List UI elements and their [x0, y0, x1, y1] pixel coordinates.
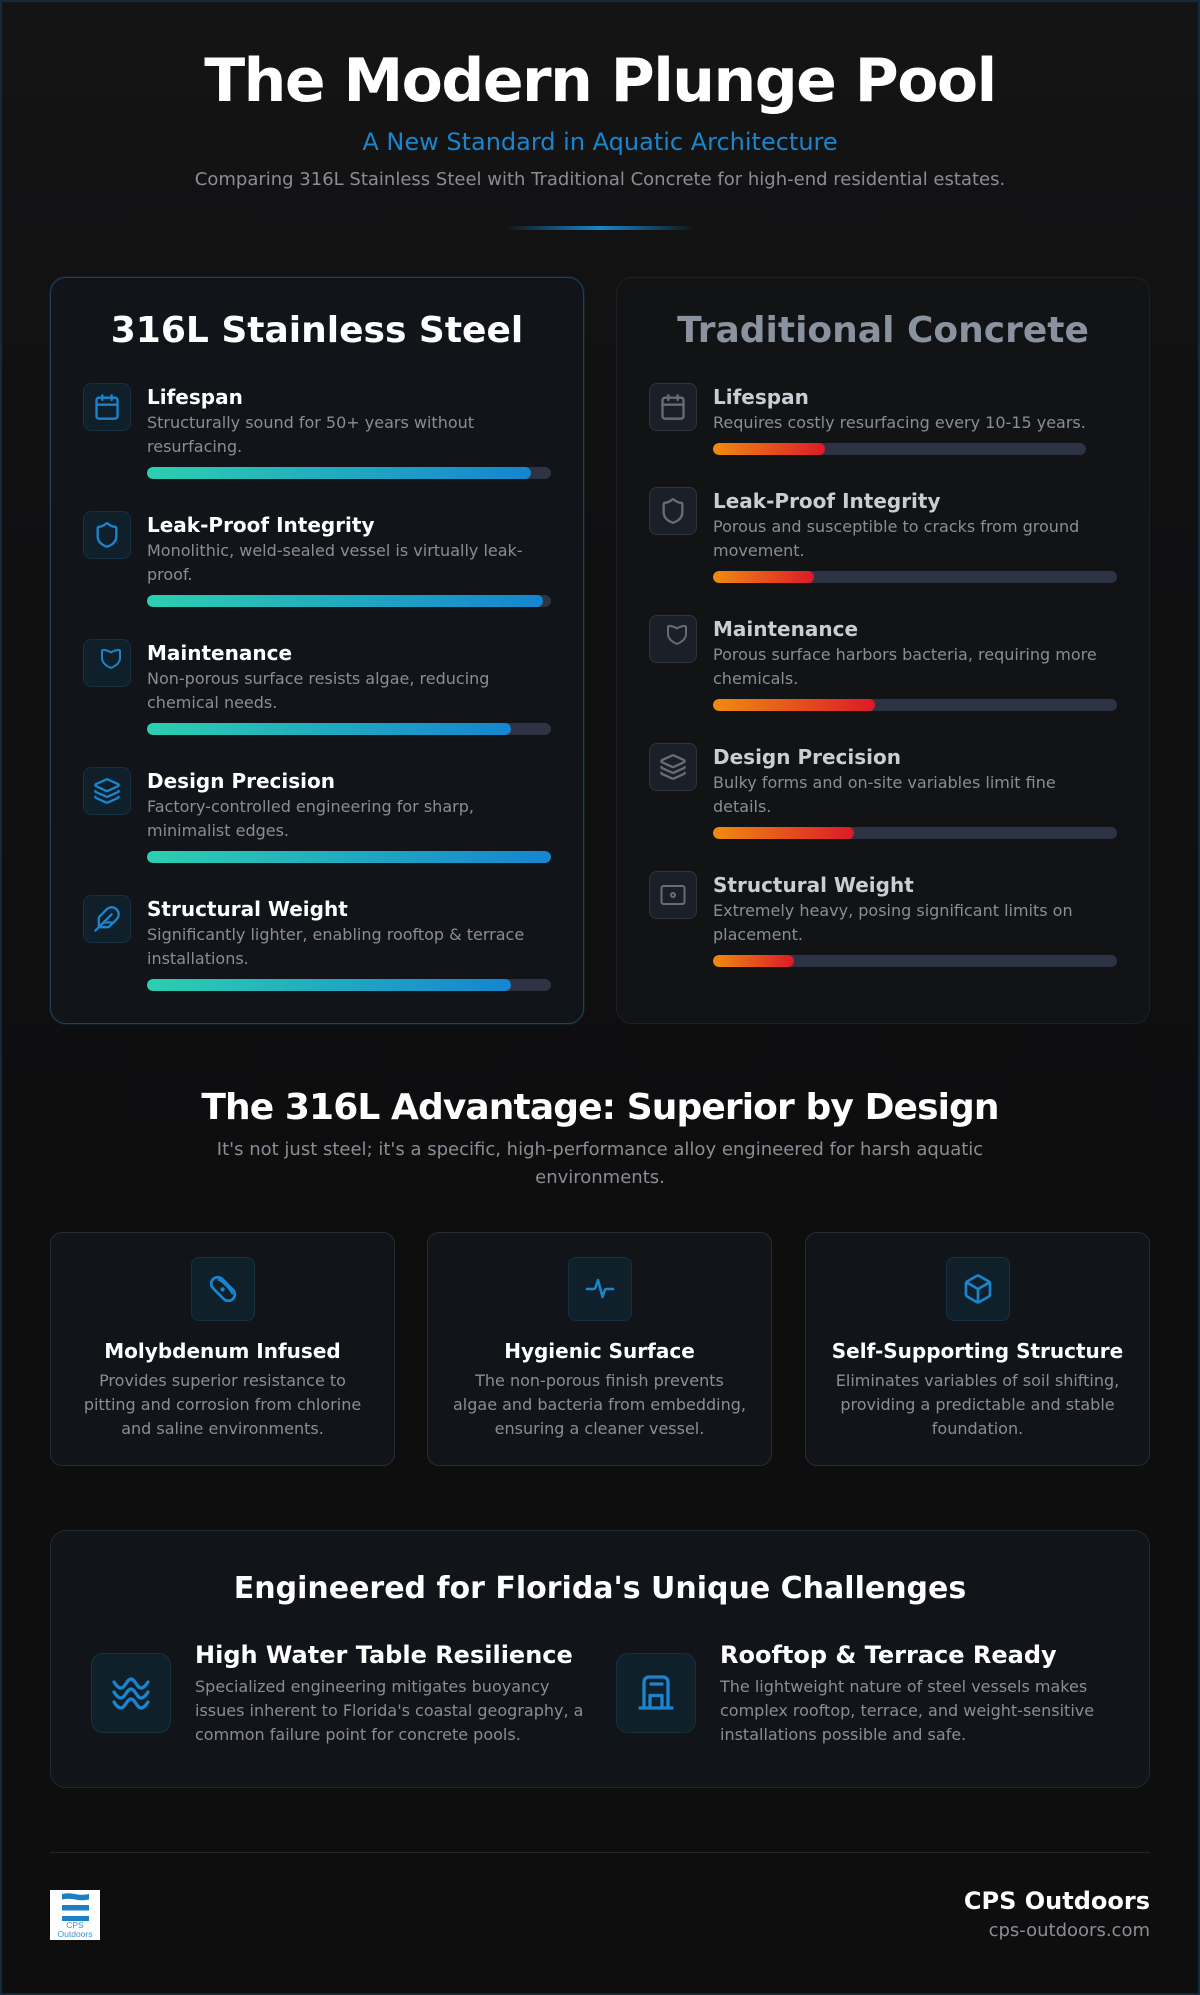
item description: Bulky forms and on-site variables limit fine [713, 773, 1056, 792]
item description: minimalist edges. [147, 821, 289, 840]
card title: Molybdenum Infused [104, 1339, 341, 1363]
score bar 90% [147, 723, 551, 735]
item description: Porous surface harbors bacteria, requiring more [713, 645, 1097, 664]
footer rule [50, 1852, 1150, 1853]
card description [84, 1371, 361, 1438]
icon: feather [83, 895, 131, 943]
item description: proof. [147, 565, 193, 584]
item description: Monolithic, weld-sealed vessel is virtually leak- [147, 541, 523, 560]
item description: Requires costly resurfacing every 10-15 years. [713, 413, 1086, 432]
card description: ensuring a cleaner vessel. [495, 1419, 704, 1438]
card title: Hygienic Surface [504, 1339, 695, 1363]
item title: Leak-Proof Integrity [713, 489, 941, 513]
feature title: High Water Table Resilience [195, 1641, 573, 1669]
item title: Lifespan [147, 385, 243, 409]
panel heading: 316L Stainless Steel [111, 310, 523, 351]
item description: details. [713, 797, 771, 816]
card: Molybdenum Infused [50, 1232, 395, 1466]
item description [713, 517, 1079, 560]
feature description [195, 1677, 583, 1744]
item description [713, 645, 1097, 688]
icon: layers [649, 743, 697, 791]
score bar 90% [147, 979, 551, 991]
panel: Traditional Concrete [616, 277, 1150, 1024]
logo [50, 1890, 100, 1940]
icon: shield [649, 487, 697, 535]
card title: Self-Supporting Structure [832, 1339, 1123, 1363]
icon: waves [91, 1653, 171, 1733]
feature description: complex rooftop, terrace, and weight-sensitive [720, 1701, 1094, 1720]
item description: Factory-controlled engineering for sharp, [147, 797, 474, 816]
item: Lifespan [83, 383, 551, 479]
score bar 98% [147, 595, 551, 607]
item description [147, 413, 474, 456]
item title: Design Precision [147, 769, 335, 793]
item description [147, 541, 523, 584]
icon: calendar [649, 383, 697, 431]
card description: pitting and corrosion from chlorine [84, 1395, 361, 1414]
item title: Design Precision [713, 745, 901, 769]
card: Hygienic Surface [427, 1232, 772, 1466]
card description [836, 1371, 1119, 1438]
item: Leak-Proof Integrity [83, 511, 551, 607]
icon: calendar [83, 383, 131, 431]
item description: resurfacing. [147, 437, 242, 456]
item description: Structurally sound for 50+ years without [147, 413, 474, 432]
item description: movement. [713, 541, 805, 560]
score bar 95% [147, 467, 551, 479]
card description: providing a predictable and stable [840, 1395, 1115, 1414]
logo text [58, 1920, 92, 1939]
title: The Modern Plunge Pool [204, 46, 996, 116]
feature description: common failure point for concrete pools. [195, 1725, 521, 1744]
card description: algae and bacteria from embedding, [453, 1395, 746, 1414]
item title: Leak-Proof Integrity [147, 513, 375, 537]
card description: The non-porous finish prevents [475, 1371, 724, 1390]
feature description: Specialized engineering mitigates buoyancy [195, 1677, 549, 1696]
card: Self-Supporting Structure [805, 1232, 1150, 1466]
intro text: Comparing 316L Stainless Steel with Traditional Concrete for high-end residential estates. [195, 169, 1005, 190]
icon: pill [190, 1257, 254, 1321]
section intro: environments. [535, 1167, 665, 1188]
item description: chemicals. [713, 669, 798, 688]
item description: Non-porous surface resists algae, reducing [147, 669, 489, 688]
item description: placement. [713, 925, 803, 944]
item description [147, 669, 489, 712]
item description: chemical needs. [147, 693, 277, 712]
item: Leak-Proof Integrity [649, 487, 1117, 583]
item description [713, 773, 1056, 816]
card description [453, 1371, 746, 1438]
item title: Maintenance [147, 641, 292, 665]
panel: 316L Stainless Steel [50, 277, 584, 1024]
item description: Significantly lighter, enabling rooftop & terrace [147, 925, 524, 944]
panel heading: Traditional Concrete [677, 310, 1089, 351]
item title: Lifespan [713, 385, 809, 409]
logo mark [62, 1893, 89, 1921]
item: Maintenance [83, 639, 551, 735]
card description: Provides superior resistance to [99, 1371, 346, 1390]
feature description: issues inherent to Florida's coastal geography, a [195, 1701, 583, 1720]
item title: Structural Weight [147, 897, 348, 921]
item description: Extremely heavy, posing significant limits on [713, 901, 1073, 920]
icon: cube [946, 1257, 1010, 1321]
item: Structural Weight [649, 871, 1117, 967]
icon: notched shield [649, 615, 697, 663]
score bar 20% [713, 955, 1117, 967]
icon: safe weight [649, 871, 697, 919]
card description: Eliminates variables of soil shifting, [836, 1371, 1119, 1390]
item: Lifespan [649, 383, 1086, 455]
item: Maintenance [649, 615, 1117, 711]
item description: Porous and susceptible to cracks from ground [713, 517, 1079, 536]
logo text: Outdoors [58, 1929, 92, 1939]
card description: foundation. [932, 1419, 1023, 1438]
item description: installations. [147, 949, 249, 968]
panel: Florida challenges [50, 1530, 1150, 1788]
footer url: cps-outdoors.com [989, 1920, 1150, 1941]
section heading: The 316L Advantage: Superior by Design [201, 1087, 999, 1128]
section intro [217, 1139, 983, 1188]
score bar 40% [713, 699, 1117, 711]
feature title: Rooftop & Terrace Ready [720, 1641, 1057, 1669]
header divider [504, 226, 696, 230]
item title: Structural Weight [713, 873, 914, 897]
icon: activity [568, 1257, 632, 1321]
score bar 30% [713, 443, 1086, 455]
item description [147, 925, 524, 968]
panel heading: Engineered for Florida's Unique Challenges [234, 1571, 966, 1606]
feature description [720, 1677, 1094, 1744]
item title: Maintenance [713, 617, 858, 641]
logo text: CPS [66, 1920, 84, 1930]
icon: building [616, 1653, 696, 1733]
score bar 100% [147, 851, 551, 863]
item description [713, 901, 1073, 944]
icon: shield [83, 511, 131, 559]
item: Structural Weight [83, 895, 551, 991]
subtitle: A New Standard in Aquatic Architecture [362, 128, 838, 156]
icon: layers [83, 767, 131, 815]
score bar 35% [713, 827, 1117, 839]
card description: and saline environments. [121, 1419, 324, 1438]
score bar 25% [713, 571, 1117, 583]
footer brand: CPS Outdoors [964, 1887, 1150, 1915]
feature description: The lightweight nature of steel vessels makes [720, 1677, 1087, 1696]
item description [147, 797, 474, 840]
icon: notched shield [83, 639, 131, 687]
item: Design Precision [83, 767, 551, 863]
feature description: installations possible and safe. [720, 1725, 966, 1744]
item: Design Precision [649, 743, 1117, 839]
section intro: It's not just steel; it's a specific, high-performance alloy engineered for harsh aquatic [217, 1139, 983, 1160]
